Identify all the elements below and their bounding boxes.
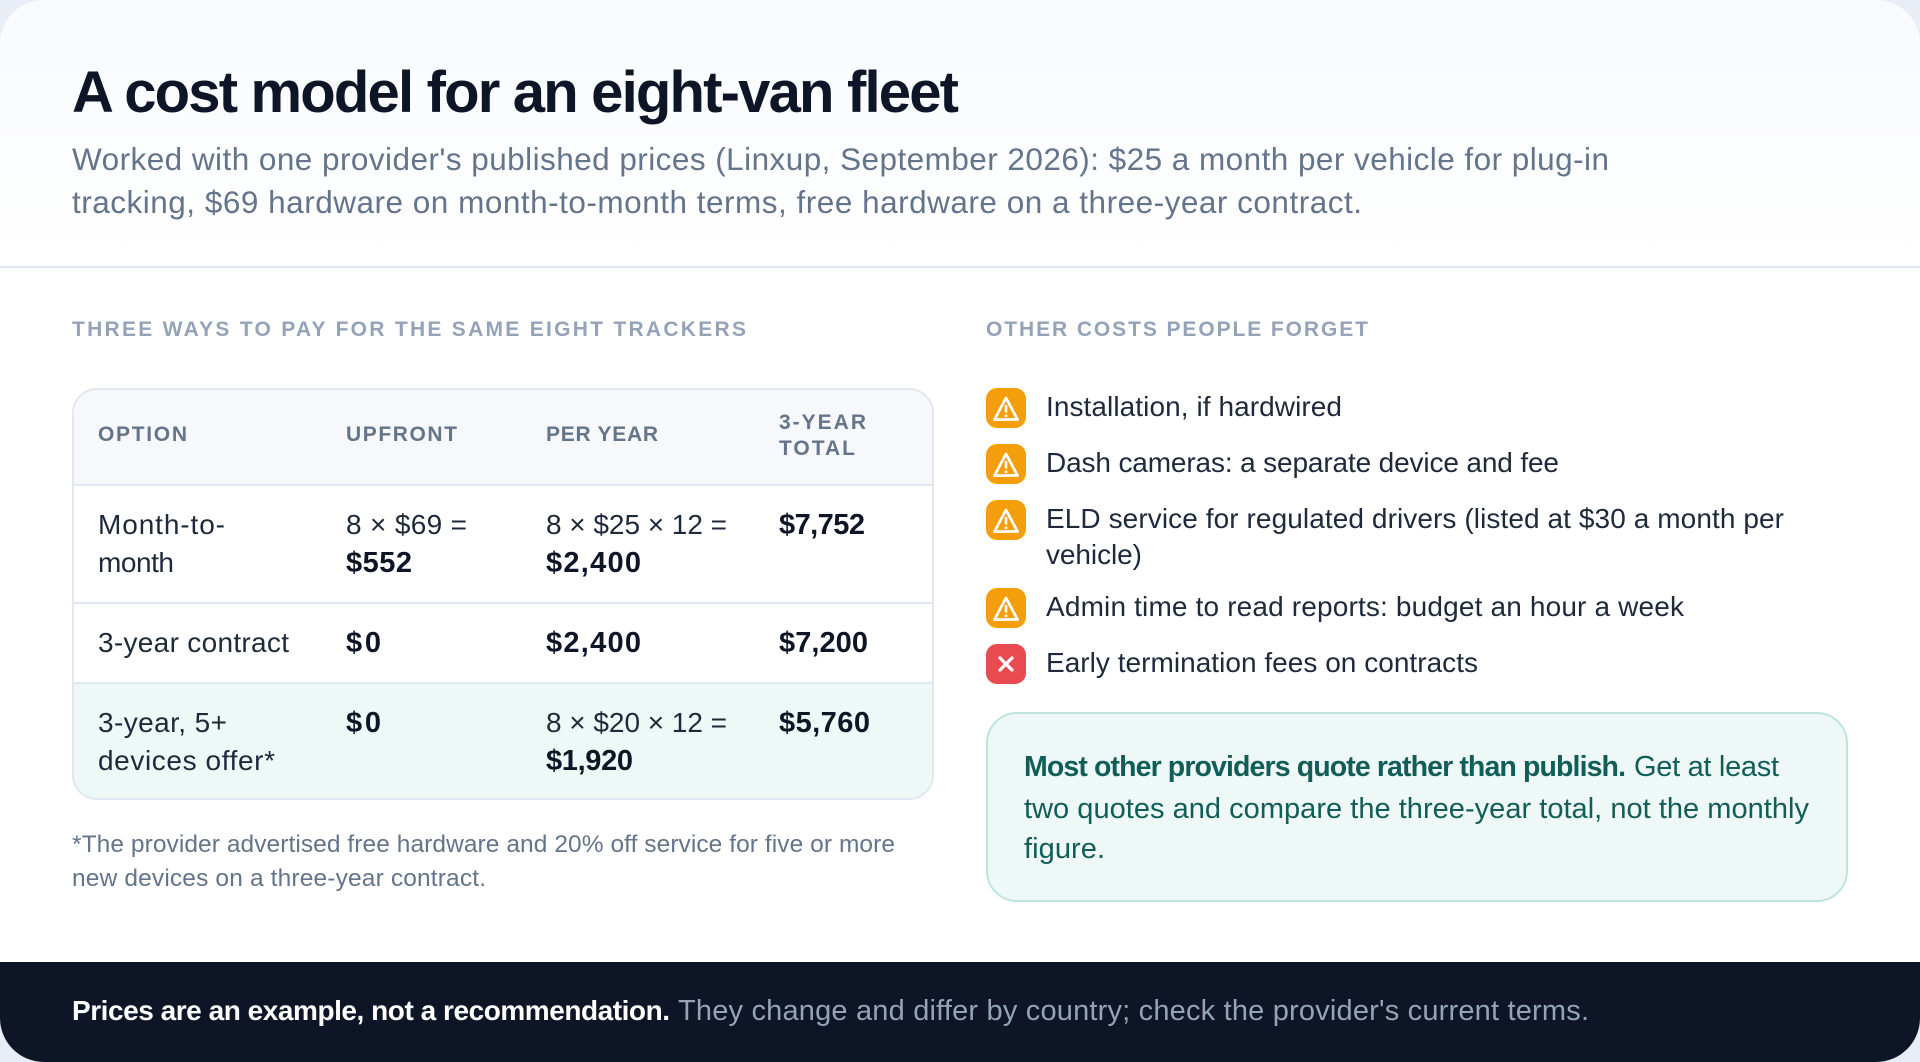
icon: warning (986, 388, 1026, 428)
heading: other costs: OTHER COSTS PEOPLE FORGET (986, 318, 1368, 341)
footer band (0, 962, 1920, 1062)
footnote: new devices on a three-year contract. (72, 865, 486, 892)
item: ELD service (986, 500, 1784, 570)
heading: three ways to pay: THREE WAYS TO PAY FOR THE SAME EIGHT TRACKERS (72, 318, 746, 341)
table header row: TOTAL (779, 437, 855, 460)
row: 3-year 5+ devices offer: $5,760 (779, 707, 870, 739)
row: 3-year 5+ devices offer: devices offer* (98, 745, 275, 776)
callout: Most other providers quote rather than publish. (1024, 751, 1626, 783)
row: 3-year 5+ devices offer: 3-year, 5+ (98, 707, 227, 738)
icon: warning (986, 500, 1026, 540)
item: ELD service: ELD service for regulated drivers (listed at $30 a month per (1046, 503, 1784, 534)
item: ELD service: vehicle) (1046, 539, 1142, 570)
subtitle (72, 141, 1609, 220)
row: month-to-month: 8 × $69 = (346, 509, 467, 540)
row: 3-year 5+ devices offer: $0 (346, 707, 381, 739)
row: 3-year contract (98, 627, 868, 659)
subtitle: tracking, $69 hardware on month-to-month terms, free hardware on a three-year contract. (72, 184, 1362, 220)
subtitle: Worked with one provider's published prices (Linxup, September 2026): $25 a month per vehicle for plug-in (72, 141, 1609, 177)
table header row (98, 411, 866, 460)
row: month-to-month: month (98, 547, 174, 578)
footer text: They change and differ by country; check the provider's current terms. (678, 995, 1589, 1027)
item: dash cameras (986, 444, 1559, 484)
row: month-to-month: $7,752 (779, 509, 865, 541)
table header row: OPTION (98, 423, 187, 446)
row: month-to-month: 8 × $25 × 12 = (546, 509, 727, 540)
row: 3-year 5+ devices offer: $1,920 (546, 745, 633, 777)
callout (987, 713, 1847, 901)
item: admin time: Admin time to read reports: budget an hour a week (1046, 591, 1685, 622)
row: 3-year contract: $0 (346, 627, 381, 659)
footer text: Prices are an example, not a recommendation. (72, 995, 670, 1026)
item: installation (986, 388, 1342, 428)
row: month-to-month: $2,400 (546, 547, 641, 579)
footnote: *The provider advertised free hardware and 20% off service for five or more (72, 831, 895, 858)
icon: warning (986, 444, 1026, 484)
table header row: PER YEAR (546, 423, 658, 446)
table header row: 3-YEAR (779, 411, 866, 434)
row: 3-year contract: $7,200 (779, 627, 868, 659)
row: month-to-month (98, 509, 865, 579)
panel: cost table (73, 389, 933, 799)
footer text (72, 995, 1589, 1027)
table header row: UPFRONT (346, 423, 457, 446)
callout: Get at least (1634, 751, 1779, 783)
item: early termination: Early termination fees on contracts (1046, 647, 1478, 678)
item: installation: Installation, if hardwired (1046, 391, 1342, 422)
callout: two quotes and compare the three-year total, not the monthly (1024, 793, 1810, 825)
item: dash cameras: Dash cameras: a separate device and fee (1046, 447, 1559, 478)
title: A cost model for an eight-van fleet (72, 60, 959, 125)
list: other costs (986, 388, 1784, 684)
row: month-to-month: Month-to- (98, 509, 225, 540)
row: month-to-month: $552 (346, 547, 412, 579)
row: 3-year 5+ devices offer: 8 × $20 × 12 = (546, 707, 727, 738)
icon: cross (986, 644, 1026, 684)
footnote (72, 831, 895, 892)
item: early termination (986, 644, 1478, 684)
row: 3-year contract: $2,400 (546, 627, 641, 659)
callout: figure. (1024, 833, 1105, 865)
row: 3-year contract: 3-year contract (98, 627, 289, 658)
icon: warning (986, 588, 1026, 628)
row: 3-year 5+ devices offer (98, 707, 870, 777)
header band (0, 266, 1920, 268)
